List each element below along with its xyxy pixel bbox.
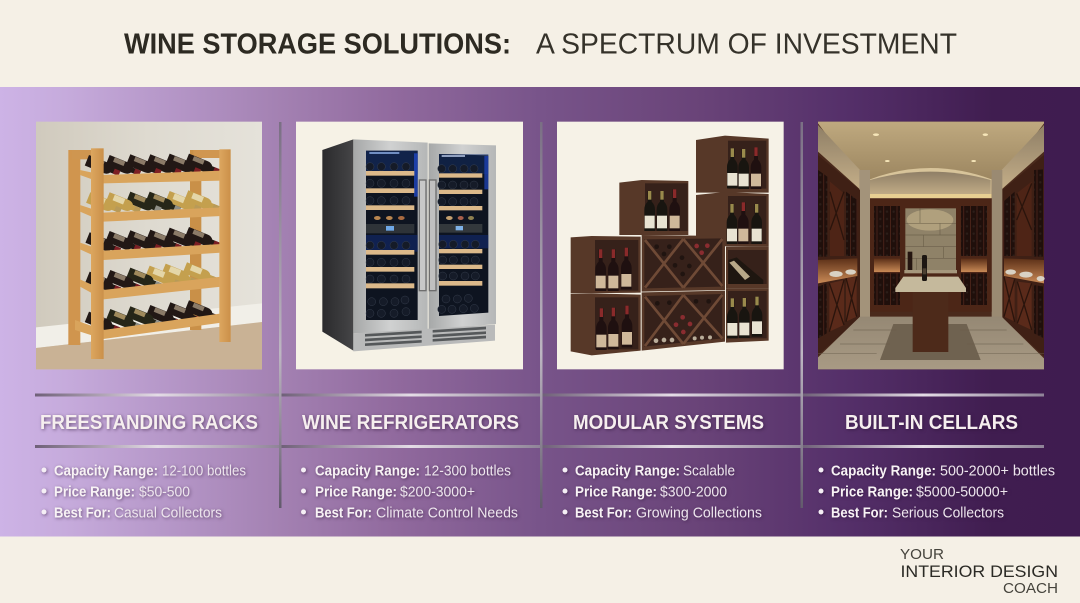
- bullet list: built-in cellars: Best For:: [831, 506, 888, 522]
- bullet list: freestanding racks: Price Range:: [54, 484, 135, 500]
- title: [124, 28, 957, 60]
- heading: modular systems: MODULAR SYSTEMS: [573, 412, 764, 434]
- bullet list: freestanding racks: Casual Collectors: [114, 506, 222, 522]
- bullet list: built-in cellars: Price Range:: [831, 484, 913, 500]
- heading: built-in cellars: BUILT-IN CELLARS: [845, 412, 1018, 434]
- bullet list: wine refrigerators: 12-300 bottles: [424, 464, 511, 480]
- bullet list: built-in cellars: 500-2000+ bottles: [940, 464, 1055, 480]
- bullet list: freestanding racks: [42, 464, 246, 522]
- panel: freestanding racks: [36, 122, 262, 521]
- bullet list: built-in cellars: Serious Collectors: [892, 506, 1004, 522]
- panel: modular systems: [557, 122, 784, 521]
- image: built-in wine cellar room: [818, 122, 1045, 369]
- panel: wine refrigerators: [296, 122, 523, 521]
- bullet list: modular systems: Capacity Range:: [575, 464, 680, 480]
- bullet list: freestanding racks: 12-100 bottles: [162, 464, 246, 480]
- logo: your interior design coach: INTERIOR DESIGN: [900, 562, 1058, 581]
- bullet list: modular systems: Growing Collections: [636, 506, 762, 522]
- heading: freestanding racks: FREESTANDING RACKS: [40, 412, 258, 434]
- title: A SPECTRUM OF INVESTMENT: [536, 28, 957, 60]
- bullet list: wine refrigerators: Capacity Range:: [315, 464, 420, 480]
- bullet list: built-in cellars: Capacity Range:: [831, 464, 936, 480]
- logo: your interior design coach: COACH: [1003, 581, 1058, 597]
- bullet list: freestanding racks: Capacity Range:: [54, 464, 158, 480]
- heading: wine refrigerators: WINE REFRIGERATORS: [302, 412, 519, 434]
- bullet list: wine refrigerators: Best For:: [315, 506, 372, 522]
- bullet list: wine refrigerators: Climate Control Needs: [376, 506, 518, 522]
- title: WINE STORAGE SOLUTIONS:: [124, 28, 511, 60]
- bullet list: freestanding racks: Best For:: [54, 506, 111, 522]
- image: dual-door wine refrigerator: [296, 122, 523, 369]
- logo: your interior design coach: YOUR: [900, 546, 944, 563]
- gradient band: [0, 87, 1080, 536]
- bullet list: modular systems: [562, 464, 762, 522]
- bullet list: built-in cellars: $5000-50000+: [916, 484, 1008, 500]
- bullet list: modular systems: Price Range:: [575, 484, 657, 500]
- panel: built-in cellars: [818, 122, 1055, 521]
- image: modular wine cubes: [557, 122, 784, 369]
- image: wooden wine rack: [36, 122, 262, 369]
- bullet list: freestanding racks: $50-500: [139, 484, 190, 500]
- bullet list: modular systems: Scalable: [683, 464, 735, 480]
- bullet list: wine refrigerators: [301, 464, 518, 522]
- bullet list: modular systems: Best For:: [575, 506, 632, 522]
- bullet list: wine refrigerators: $200-3000+: [400, 484, 475, 500]
- bullet list: built-in cellars: [818, 464, 1055, 522]
- bullet list: modular systems: $300-2000: [660, 484, 727, 500]
- bullet list: wine refrigerators: Price Range:: [315, 484, 397, 500]
- logo: your interior design coach: [900, 546, 1058, 597]
